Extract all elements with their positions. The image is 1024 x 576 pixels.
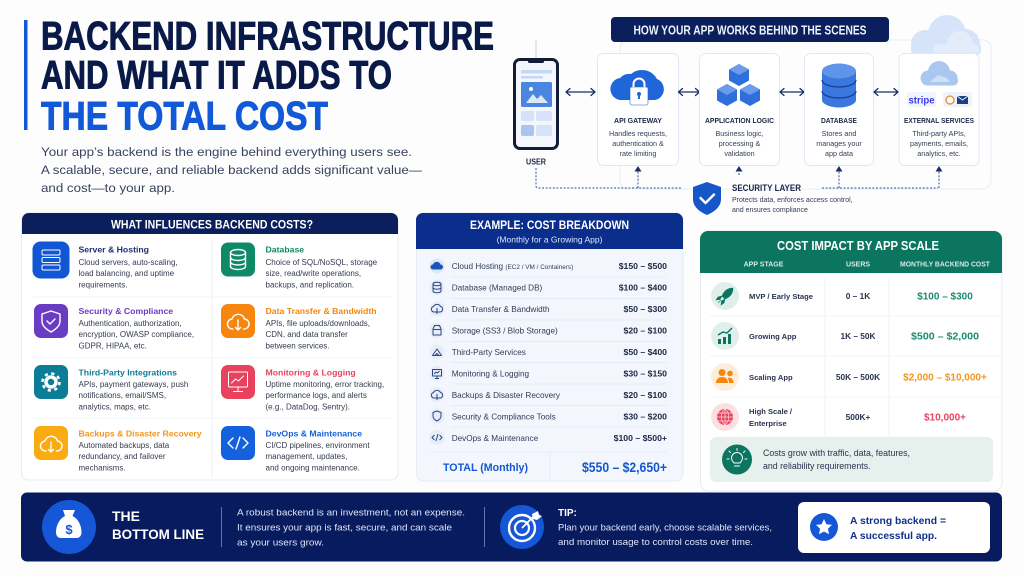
row: data transfer: Data Transfer & Bandwidth: [452, 305, 550, 314]
bottom line heading: [112, 508, 204, 542]
card: database: Stores and: [822, 129, 856, 138]
icon: cubes: [717, 64, 760, 106]
icon: background cloud: [911, 15, 981, 59]
total row: $550 – $2,650+: [582, 459, 667, 475]
panel heading: [700, 231, 1002, 273]
card: api gateway: authentication &: [612, 139, 664, 148]
panel heading: (Monthly for a Growing App): [497, 234, 603, 244]
panel: what influences backend costs: [22, 213, 398, 480]
icon: database cylinder: [822, 64, 856, 108]
diagram heading: HOW YOUR APP WORKS BEHIND THE SCENES: [634, 24, 866, 38]
row: cloud hosting: [430, 258, 667, 274]
row: scaling app: Scaling App: [749, 373, 793, 382]
row: scaling app: $2,000 – $10,000+: [903, 372, 987, 384]
item: server and hosting: requirements.: [78, 280, 127, 290]
item: security and compliance: encryption, OWASP compliance,: [78, 330, 194, 339]
user label: USER: [526, 158, 546, 166]
row: cloud hosting: $150 – $500: [619, 261, 667, 271]
title: BACKEND INFRASTRUCTURE: [41, 14, 494, 58]
row: backups: Backups & Disaster Recovery: [452, 391, 561, 400]
callout: costs grow: and reliability requirements.: [763, 461, 871, 471]
row: mvp: 0 – 1K: [846, 291, 870, 301]
icon: messaging logos: [943, 92, 972, 107]
panel heading: COST IMPACT BY APP SCALE: [777, 239, 939, 253]
card: external services: payments, emails,: [910, 139, 968, 148]
row: database: [430, 280, 667, 295]
arrow: gateway to logic: [678, 88, 700, 96]
panel heading: [416, 213, 683, 249]
icon: storage: [430, 323, 444, 338]
icon: chart: [711, 322, 739, 350]
bottom line heading: THE: [112, 508, 140, 524]
row: scaling app: [711, 363, 987, 391]
panel heading: MONTHLY BACKEND COST: [900, 262, 991, 268]
row: backups: $20 – $100: [624, 390, 667, 400]
icon: money bag: [42, 500, 96, 554]
item: database: Database: [266, 244, 304, 254]
icon: target: [500, 505, 544, 549]
security layer text: [732, 183, 853, 214]
row: database: Database (Managed DB): [452, 284, 543, 292]
item: third-party integrations: APIs, payment gateways, push: [78, 380, 188, 389]
card: application logic: Business logic,: [716, 129, 763, 138]
row: mvp: [711, 282, 973, 310]
card: api gateway: rate limiting: [620, 149, 656, 158]
icon: monitor: [221, 365, 255, 399]
icon: security shield: [693, 182, 721, 215]
tip text: [558, 508, 772, 547]
item: security and compliance: Security & Compliance: [78, 306, 173, 316]
item: security and compliance: [34, 304, 194, 350]
panel heading: EXAMPLE: COST BREAKDOWN: [470, 220, 629, 232]
security layer text: SECURITY LAYER: [732, 183, 801, 193]
card: external services: analytics, etc.: [917, 149, 961, 158]
item: monitoring and logging: Monitoring & Logging: [266, 368, 356, 378]
bottom line text: A robust backend is an investment, not an expense.: [237, 506, 465, 518]
title: THE TOTAL COST: [41, 94, 328, 138]
icon: cloud backup: [34, 426, 68, 460]
bottom line heading: BOTTOM LINE: [112, 526, 204, 542]
row: growing app: 1K – 50K: [840, 331, 876, 341]
icon: shield: [34, 304, 68, 338]
row: monitoring: [430, 366, 667, 381]
panel heading: USERS: [846, 262, 870, 268]
icon: gear: [34, 365, 68, 399]
user phone: [513, 58, 559, 166]
arrow: user to gateway: [566, 88, 595, 96]
row: storage: [430, 323, 667, 338]
item: server and hosting: Server & Hosting: [78, 244, 149, 254]
intro text: and cost—to your app.: [41, 181, 175, 195]
item: third-party integrations: Third-Party Integrations: [78, 368, 177, 378]
title: [24, 14, 494, 138]
panel heading: WHAT INFLUENCES BACKEND COSTS?: [111, 218, 313, 232]
icon: light bulb: [722, 444, 752, 474]
row: devops: DevOps & Maintenance: [452, 434, 539, 443]
item: server and hosting: Cloud servers, auto-scaling,: [78, 258, 178, 267]
dashed security connectors: [536, 166, 942, 188]
row: monitoring: $30 – $150: [624, 368, 667, 378]
callout: costs grow: Costs grow with traffic, data, features,: [763, 448, 910, 458]
row: mvp: MVP / Early Stage: [749, 292, 813, 301]
icon: rocket: [711, 282, 739, 310]
card: api gateway: [598, 54, 678, 166]
icon: star: [810, 513, 838, 541]
title: AND WHAT IT ADDS TO: [41, 54, 392, 98]
item: monitoring and logging: (e.g., DataDog, Sentry).: [266, 402, 350, 412]
card: database: [804, 54, 874, 166]
item: backups and disaster recovery: mechanisms.: [78, 464, 126, 472]
card: database: DATABASE: [821, 116, 857, 125]
item: devops and maintenance: [221, 426, 370, 472]
row: monitoring: Monitoring & Logging: [452, 370, 530, 378]
row: third-party services: Third-Party Services: [452, 348, 526, 357]
security layer text: Protects data, enforces access control,: [732, 197, 853, 204]
card: database: app data: [825, 149, 853, 158]
item: devops and maintenance: and ongoing maintenance.: [266, 464, 360, 472]
icon: database: [221, 242, 255, 276]
card: external services: [899, 54, 979, 166]
item: database: backups, and replication.: [266, 280, 354, 290]
banner: bottom line: [21, 492, 1002, 562]
icon: globe: [711, 403, 739, 431]
item: data transfer and bandwidth: between services.: [266, 342, 330, 350]
item: data transfer and bandwidth: [221, 304, 377, 350]
row: growing app: [711, 322, 979, 350]
row: backups: [430, 387, 667, 402]
row: data transfer: [430, 302, 667, 316]
row: high scale: Enterprise: [749, 419, 787, 428]
callout: strong backend: A strong backend =: [850, 515, 946, 527]
row: high scale: [711, 403, 966, 431]
arrow: logic to database: [780, 88, 804, 96]
item: monitoring and logging: Uptime monitoring, error tracking,: [266, 380, 384, 389]
panel heading: [22, 213, 398, 234]
diagram heading: [611, 17, 889, 42]
callout: strong backend: [798, 502, 990, 553]
panel: example cost breakdown: [416, 213, 683, 481]
row: devops: $100 – $500+: [614, 433, 667, 443]
tip text: Plan your backend early, choose scalable services,: [558, 522, 772, 532]
row: database: $100 – $400: [619, 282, 667, 292]
callout: costs grow: [710, 437, 993, 482]
icon: code: [430, 430, 444, 445]
icon: database: [430, 280, 444, 295]
icon: cloud backup: [430, 387, 444, 402]
bottom line text: [237, 506, 465, 548]
card: api gateway: Handles requests,: [609, 129, 667, 138]
icon: users: [711, 363, 739, 391]
row: third-party services: $50 – $400: [624, 347, 667, 357]
total row: [443, 459, 667, 475]
icon: cloud download: [221, 304, 255, 338]
item: monitoring and logging: performance logs, and alerts: [266, 391, 367, 400]
item: security and compliance: Authentication, authorization,: [78, 319, 182, 328]
card: application logic: processing &: [719, 139, 760, 148]
intro text: [41, 145, 423, 195]
row: data transfer: $50 – $300: [624, 304, 667, 314]
row: security tools: $30 – $200: [624, 412, 667, 422]
row: third-party services: [430, 344, 667, 360]
diagram: how your app works: [513, 15, 991, 215]
item: devops and maintenance: management, updates,: [266, 452, 347, 461]
icon: cloud upload: [430, 302, 444, 316]
item: database: size, read/write operations,: [266, 269, 361, 278]
tip text: TIP:: [558, 508, 577, 519]
row: storage: Storage (SS3 / Blob Storage): [452, 326, 558, 336]
callout: strong backend: A successful app.: [850, 530, 937, 542]
icon: monitor: [430, 366, 444, 381]
row: growing app: $500 – $2,000: [911, 332, 979, 342]
item: backups and disaster recovery: [34, 426, 202, 472]
row: high scale: High Scale /: [749, 407, 793, 416]
row: security tools: [430, 408, 667, 424]
logo: stripe: stripe: [908, 94, 935, 106]
row: mvp: $100 – $300: [917, 292, 973, 302]
item: data transfer and bandwidth: CDN, and data transfer: [266, 330, 348, 339]
icon: cloud lock: [610, 70, 664, 105]
row: cloud hosting: Cloud Hosting (EC2 / VM / Containers): [452, 262, 573, 271]
icon: money bag: $: [65, 522, 73, 537]
tip text: and monitor usage to control costs over time.: [558, 536, 753, 547]
card: database: manages your: [816, 139, 862, 148]
item: server and hosting: [32, 242, 178, 290]
item: database: Choice of SQL/NoSQL, storage: [266, 258, 378, 267]
arrow: database to external: [874, 88, 898, 96]
card: application logic: APPLICATION LOGIC: [705, 116, 774, 125]
item: third-party integrations: [34, 365, 188, 412]
item: database: [221, 242, 378, 290]
row: security tools: Security & Compliance Tools: [452, 412, 556, 422]
bottom line text: It ensures your app is fast, secure, and can scale: [237, 522, 452, 532]
intro text: A scalable, secure, and reliable backend adds significant value—: [41, 163, 423, 177]
icon: server: [32, 242, 70, 278]
item: devops and maintenance: DevOps & Maintenance: [266, 428, 362, 438]
icon: shield: [430, 408, 444, 424]
row: growing app: Growing App: [749, 332, 797, 341]
item: third-party integrations: analytics, maps, etc.: [78, 402, 151, 412]
item: backups and disaster recovery: redundancy, and failover: [78, 452, 166, 461]
item: backups and disaster recovery: Backups & Disaster Recovery: [78, 428, 202, 438]
item: devops and maintenance: CI/CD pipelines, environment: [266, 441, 370, 450]
panel heading: APP STAGE: [744, 262, 784, 268]
card: application logic: [700, 54, 780, 166]
item: data transfer and bandwidth: APIs, file uploads/downloads,: [266, 319, 370, 328]
icon: cloud: [430, 258, 444, 274]
row: scaling app: 50K – 500K: [836, 372, 880, 382]
card: api gateway: API GATEWAY: [614, 116, 662, 125]
row: devops: [430, 430, 667, 445]
item: backups and disaster recovery: Automated backups, data: [78, 441, 170, 450]
card: external services: Third-party APIs,: [912, 129, 966, 138]
item: monitoring and logging: [221, 365, 384, 412]
item: data transfer and bandwidth: Data Transfer & Bandwidth: [266, 306, 377, 316]
card: external services: EXTERNAL SERVICES: [904, 116, 974, 125]
icon: code: [221, 426, 255, 460]
security layer text: and ensures compliance: [732, 207, 808, 214]
bottom line text: as your users grow.: [237, 536, 324, 548]
icon: cloud network: [430, 344, 444, 360]
row: high scale: 500K+: [846, 412, 870, 422]
total row: TOTAL (Monthly): [443, 462, 528, 474]
item: server and hosting: load balancing, and uptime: [78, 269, 175, 278]
row: high scale: $10,000+: [924, 412, 966, 424]
icon: external cloud: [920, 61, 958, 86]
card: application logic: validation: [724, 149, 755, 158]
item: third-party integrations: notifications, email/SMS,: [78, 391, 166, 400]
item: security and compliance: GDPR, HIPAA, etc.: [78, 342, 147, 350]
panel: cost impact by app scale: [700, 231, 1002, 491]
intro text: Your app’s backend is the engine behind everything users see.: [41, 145, 412, 159]
row: storage: $20 – $100: [624, 326, 667, 336]
